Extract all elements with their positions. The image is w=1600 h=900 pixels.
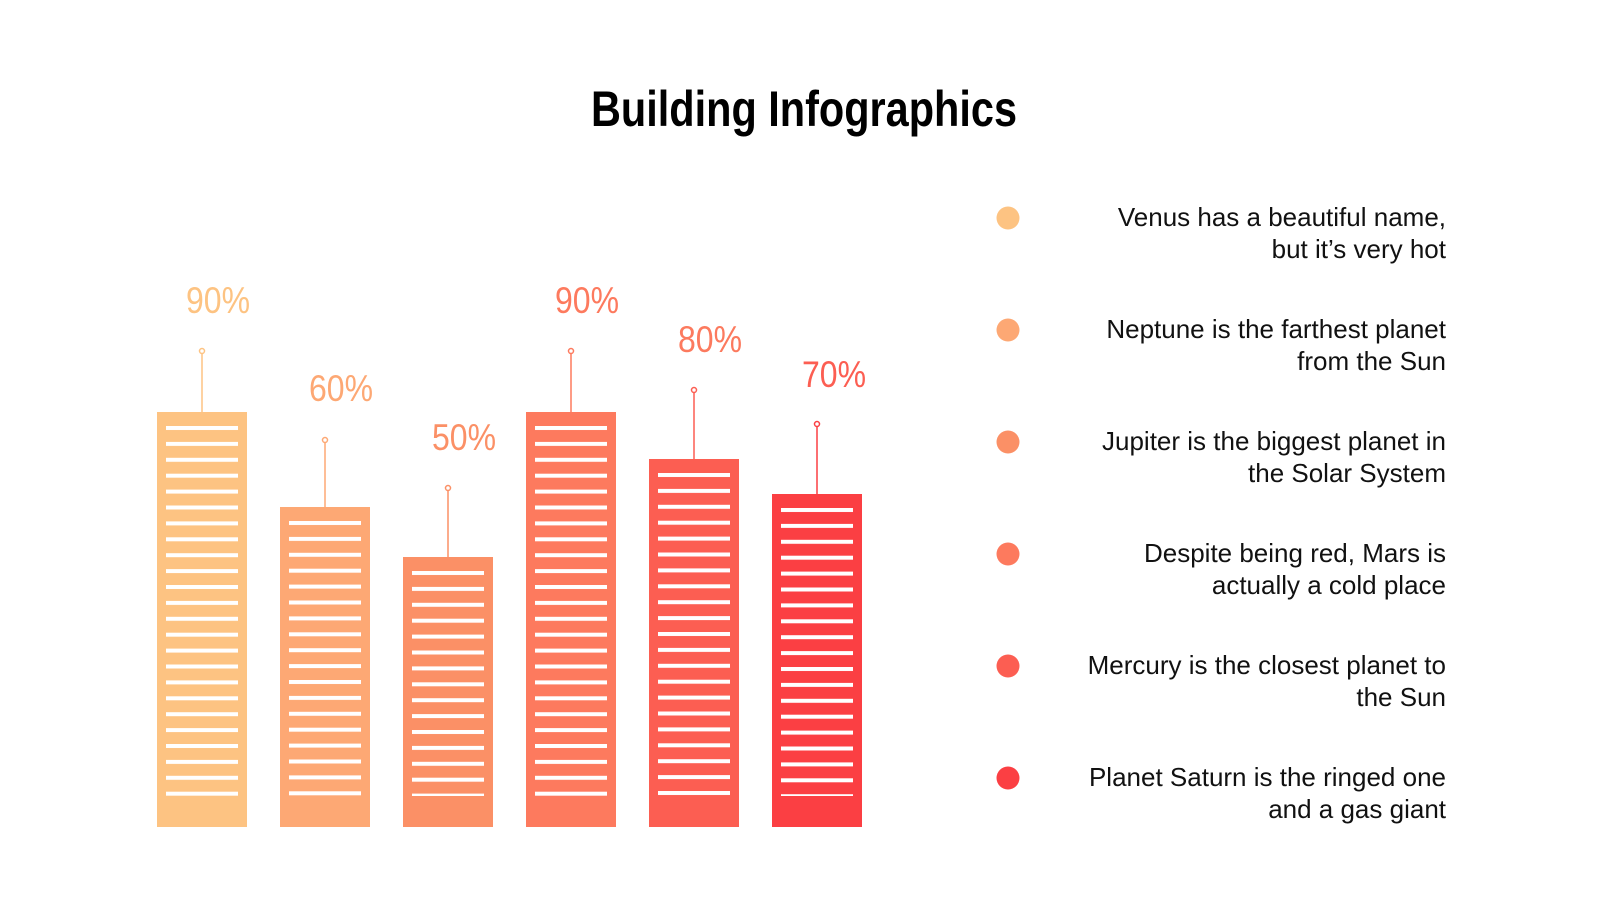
bar 2: 60%: [280, 368, 373, 827]
bar 1: 90%: 90%: [186, 280, 250, 321]
bar 6: 70%: [772, 354, 866, 827]
legend item 3: Jupiter is the biggest planet in: [1102, 426, 1446, 456]
bar 5: 80%: 80%: [678, 319, 742, 360]
legend item 3: the Solar System: [1248, 458, 1446, 488]
legend item 2: from the Sun: [1297, 346, 1446, 376]
legend item 4: [996, 538, 1446, 600]
legend item 5: Mercury is the closest planet to: [1088, 650, 1446, 680]
bar 2: 60%: 60%: [309, 368, 373, 409]
title: Building Infographics: [591, 81, 1017, 137]
legend: [996, 202, 1447, 824]
legend item 2: Neptune is the farthest planet: [1106, 314, 1447, 344]
legend item 5: the Sun: [1356, 682, 1446, 712]
legend item 5: [996, 650, 1446, 712]
legend item 1: but it’s very hot: [1272, 234, 1447, 264]
bar 5: 80%: [649, 319, 742, 827]
legend item 4: Despite being red, Mars is: [1144, 538, 1446, 568]
legend item 2: [996, 314, 1447, 376]
bar 4: 90%: 90%: [555, 280, 619, 321]
bar 1: 90%: [157, 280, 250, 827]
legend item 1: Venus has a beautiful name,: [1118, 202, 1446, 232]
legend item 6: and a gas giant: [1268, 794, 1447, 824]
bar 6: 70%: 70%: [802, 354, 866, 395]
bar 4: 90%: [526, 280, 619, 827]
bar 3: 50%: [403, 417, 496, 827]
legend item 3: [996, 426, 1446, 488]
bar 3: 50%: 50%: [432, 417, 496, 458]
bar chart: [157, 280, 866, 827]
legend item 6: [996, 762, 1447, 824]
legend item 1: [996, 202, 1447, 264]
legend item 4: actually a cold place: [1212, 570, 1446, 600]
legend item 6: Planet Saturn is the ringed one: [1089, 762, 1446, 792]
